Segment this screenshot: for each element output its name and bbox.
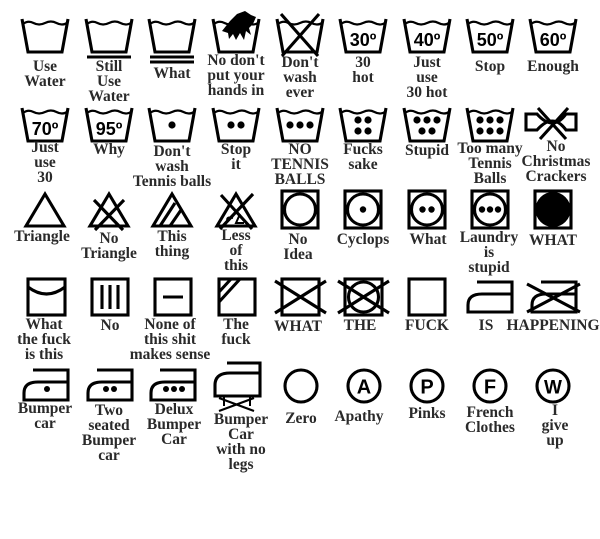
icon: three dots tub [277, 108, 323, 141]
label: no tennis balls [271, 141, 329, 188]
label: bumper car no legs: Car [228, 426, 254, 443]
label: bumper car no legs: legs [229, 456, 253, 473]
icon: circle P: P [420, 376, 434, 398]
icon: laundry three dots [472, 191, 508, 228]
icon: what two dots [409, 191, 445, 228]
label: no idea: Idea [283, 246, 313, 263]
icon: don't wash [277, 14, 323, 56]
label: none of this: None of [144, 316, 196, 333]
label: fucks sake: sake [348, 156, 378, 173]
label: what the fuck is this: the fuck [17, 331, 71, 348]
label: two seated bumper car: car [98, 447, 120, 464]
label: this thing: thing [155, 243, 189, 260]
icon: circle F [474, 370, 506, 402]
label: bumper car no legs: Bumper [214, 411, 268, 428]
icon: iron three dots [151, 370, 195, 400]
label: don't wash ever: ever [286, 84, 314, 101]
label: 30 hot [352, 54, 374, 86]
label: FUCK: FUCK [405, 317, 449, 334]
label: don't wash ever: wash [283, 69, 317, 86]
icon: 50: 50º [477, 30, 504, 50]
icon: no wring [526, 108, 576, 139]
icon: 40 [404, 19, 450, 52]
label: no triangle [81, 230, 137, 262]
icon: crossed iron [527, 282, 580, 312]
label: i give up: I [552, 402, 558, 419]
icon: square diagonal corner [219, 279, 255, 315]
label: tennis balls: Tennis balls [133, 173, 211, 190]
icon: iron with no legs [215, 363, 260, 411]
label: christmas crackers [522, 138, 590, 185]
label: no idea: No [289, 231, 307, 248]
label: what the fuck is this: is this [25, 346, 63, 363]
label: HAPPENING: HAPPENING [506, 317, 600, 334]
label: stop it: it [231, 156, 241, 173]
icon: less of this [217, 194, 255, 229]
icon: four dots tub [340, 108, 386, 141]
icon: 30 [340, 19, 386, 52]
label: don't wash ever [281, 54, 319, 101]
label: less of this: Less [221, 227, 251, 244]
icon: still use water [86, 19, 132, 57]
label: hands: No don't [207, 52, 265, 69]
icon: six dots tub [467, 108, 513, 141]
label: two seated bumper car: Bumper [82, 432, 136, 449]
label: WHAT: WHAT [529, 232, 577, 249]
label: too many: Balls [474, 170, 506, 187]
icon: filled circle [535, 191, 571, 228]
label: delux bumper car: Bumper [147, 416, 201, 433]
icon: no idea [282, 191, 318, 228]
icon: what [149, 19, 195, 62]
label: just use 30: Just [31, 139, 59, 156]
label: just use 30 [31, 139, 59, 186]
label: tennis balls: wash [155, 158, 189, 175]
label: what the fuck is this [17, 316, 71, 363]
icon: square three lines [92, 279, 128, 315]
label: THE: THE [344, 317, 376, 334]
icon: square arc [28, 279, 65, 315]
icon: 60 [530, 19, 576, 52]
label: less of this [221, 227, 251, 274]
label: stupid: Stupid [405, 142, 449, 159]
label: what the fuck is this: What [25, 316, 63, 333]
label: WHAT: WHAT [274, 318, 322, 335]
label: french clothes [465, 404, 515, 436]
label: the fuck: fuck [221, 331, 251, 348]
label: laundry is stupid: stupid [468, 259, 510, 276]
icon: crossed circle square [338, 279, 389, 315]
label: no tennis balls: BALLS [275, 171, 325, 188]
label: bumper car [18, 400, 72, 432]
label: too many: Too many [457, 140, 523, 157]
icon: 70: 70º [32, 119, 59, 139]
label: none of this [130, 316, 210, 363]
icon: circle W [537, 370, 569, 402]
label: still use water: Water [88, 88, 130, 105]
icon: iron two dots [88, 370, 132, 400]
label: stop it: Stop [221, 141, 251, 158]
icon: this thing [153, 194, 191, 226]
label: apathy: Apathy [334, 408, 384, 425]
icon: circle P [411, 370, 443, 402]
label: just use 30: use [34, 154, 56, 171]
label: bumper car no legs [214, 411, 268, 473]
label: two seated bumper car: Two [95, 402, 123, 419]
icon: circle F: F [484, 376, 496, 398]
icon: triangle [26, 194, 64, 226]
icon: 95 [86, 108, 132, 141]
label: zero: Zero [285, 410, 317, 427]
label: the fuck: The [223, 316, 249, 333]
icon: crossed square [275, 279, 326, 315]
label: delux bumper car [147, 401, 201, 448]
label: cyclops: Cyclops [337, 231, 389, 248]
label: too many: Tennis [468, 155, 512, 172]
label: no triangle: No [100, 230, 118, 247]
label: no: No [101, 317, 119, 334]
icon: 60: 60º [540, 30, 567, 50]
label: just use 30 hot: use [416, 69, 438, 86]
label: i give up: up [546, 432, 564, 449]
label: tennis balls [133, 143, 211, 190]
icon: use water [22, 19, 68, 52]
icon: iron [468, 282, 512, 312]
label: still use water: Still [96, 58, 122, 75]
icon: no triangle [90, 194, 128, 230]
label: pinks: Pinks [408, 405, 446, 422]
label: delux bumper car: Car [161, 431, 187, 448]
icon: 50 [467, 19, 513, 52]
label: what: What [409, 231, 447, 248]
label: bumper car: Bumper [18, 400, 72, 417]
icon: one dot tub [149, 108, 195, 141]
label: use water [24, 58, 66, 90]
label: two seated bumper car: seated [88, 417, 130, 434]
icon: circle A [348, 370, 380, 402]
label: i give up: give [542, 417, 568, 434]
label: use water: Use [33, 58, 57, 75]
label: the fuck [221, 316, 251, 348]
label: hands: put your [207, 67, 265, 84]
label: laundry is stupid [460, 229, 518, 276]
label: laundry is stupid: Laundry [460, 229, 518, 246]
label: christmas crackers: Christmas [522, 153, 590, 170]
icon: circle A: A [357, 376, 371, 398]
icon: cyclops [345, 191, 381, 228]
label: none of this: makes sense [130, 346, 210, 363]
label: triangle: Triangle [14, 228, 70, 245]
label: fucks sake [343, 141, 383, 173]
label: 30 hot: 30 [355, 54, 371, 71]
label: french clothes: Clothes [465, 419, 515, 436]
label: bumper car: car [34, 415, 56, 432]
icon: 40: 40º [414, 30, 441, 50]
label: 30 hot: hot [352, 69, 374, 86]
label: french clothes: French [466, 404, 514, 421]
label: just use 30: 30 [37, 169, 53, 186]
label: no idea [283, 231, 313, 263]
label: IS: IS [479, 317, 493, 334]
label: don't wash ever: Don't [281, 54, 319, 71]
label: no tennis balls: TENNIS [271, 156, 329, 173]
label: no triangle: Triangle [81, 245, 137, 262]
label: hands [207, 52, 265, 99]
label: use water: Water [24, 73, 66, 90]
label: too many [457, 140, 523, 187]
label: fucks sake: Fucks [343, 141, 383, 158]
label: just use 30 hot: Just [413, 54, 441, 71]
icon: 70 [22, 108, 68, 141]
icon: plain square [409, 279, 445, 315]
label: this thing: This [157, 228, 187, 245]
icon: two dots tub [213, 108, 259, 141]
label: no tennis balls: NO [288, 141, 312, 158]
label: what: What [153, 65, 191, 82]
label: stop it [221, 141, 251, 173]
icon: iron one dot [24, 370, 68, 400]
label: hands: hands in [208, 82, 264, 99]
label: christmas crackers: Crackers [525, 168, 587, 185]
icon: circle W: W [544, 378, 562, 398]
label: why: Why [93, 141, 125, 158]
label: still use water [88, 58, 130, 105]
label: less of this: of [230, 242, 242, 259]
icon: five dots tub [404, 108, 450, 141]
label: enough: Enough [527, 58, 579, 75]
label: bumper car no legs: with no [216, 441, 266, 458]
label: two seated bumper car [82, 402, 136, 464]
label: this thing [155, 228, 190, 260]
icon: 30: 30º [350, 30, 377, 50]
icon: 95: 95º [96, 119, 123, 139]
label: just use 30 hot [407, 54, 448, 101]
label: none of this: this shit [144, 331, 196, 348]
label: less of this: this [224, 257, 248, 274]
label: still use water: Use [97, 73, 121, 90]
label: laundry is stupid: is [484, 244, 494, 261]
label: tennis balls: Don't [153, 143, 191, 160]
icon: hand in tub [213, 11, 259, 52]
label: stop: Stop [475, 58, 505, 75]
label: delux bumper car: Delux [155, 401, 193, 418]
label: christmas crackers: No [547, 138, 565, 155]
icon: square line [155, 279, 191, 315]
label: i give up [542, 402, 568, 449]
icon: empty circle [285, 370, 317, 402]
label: just use 30 hot: 30 hot [407, 84, 447, 101]
